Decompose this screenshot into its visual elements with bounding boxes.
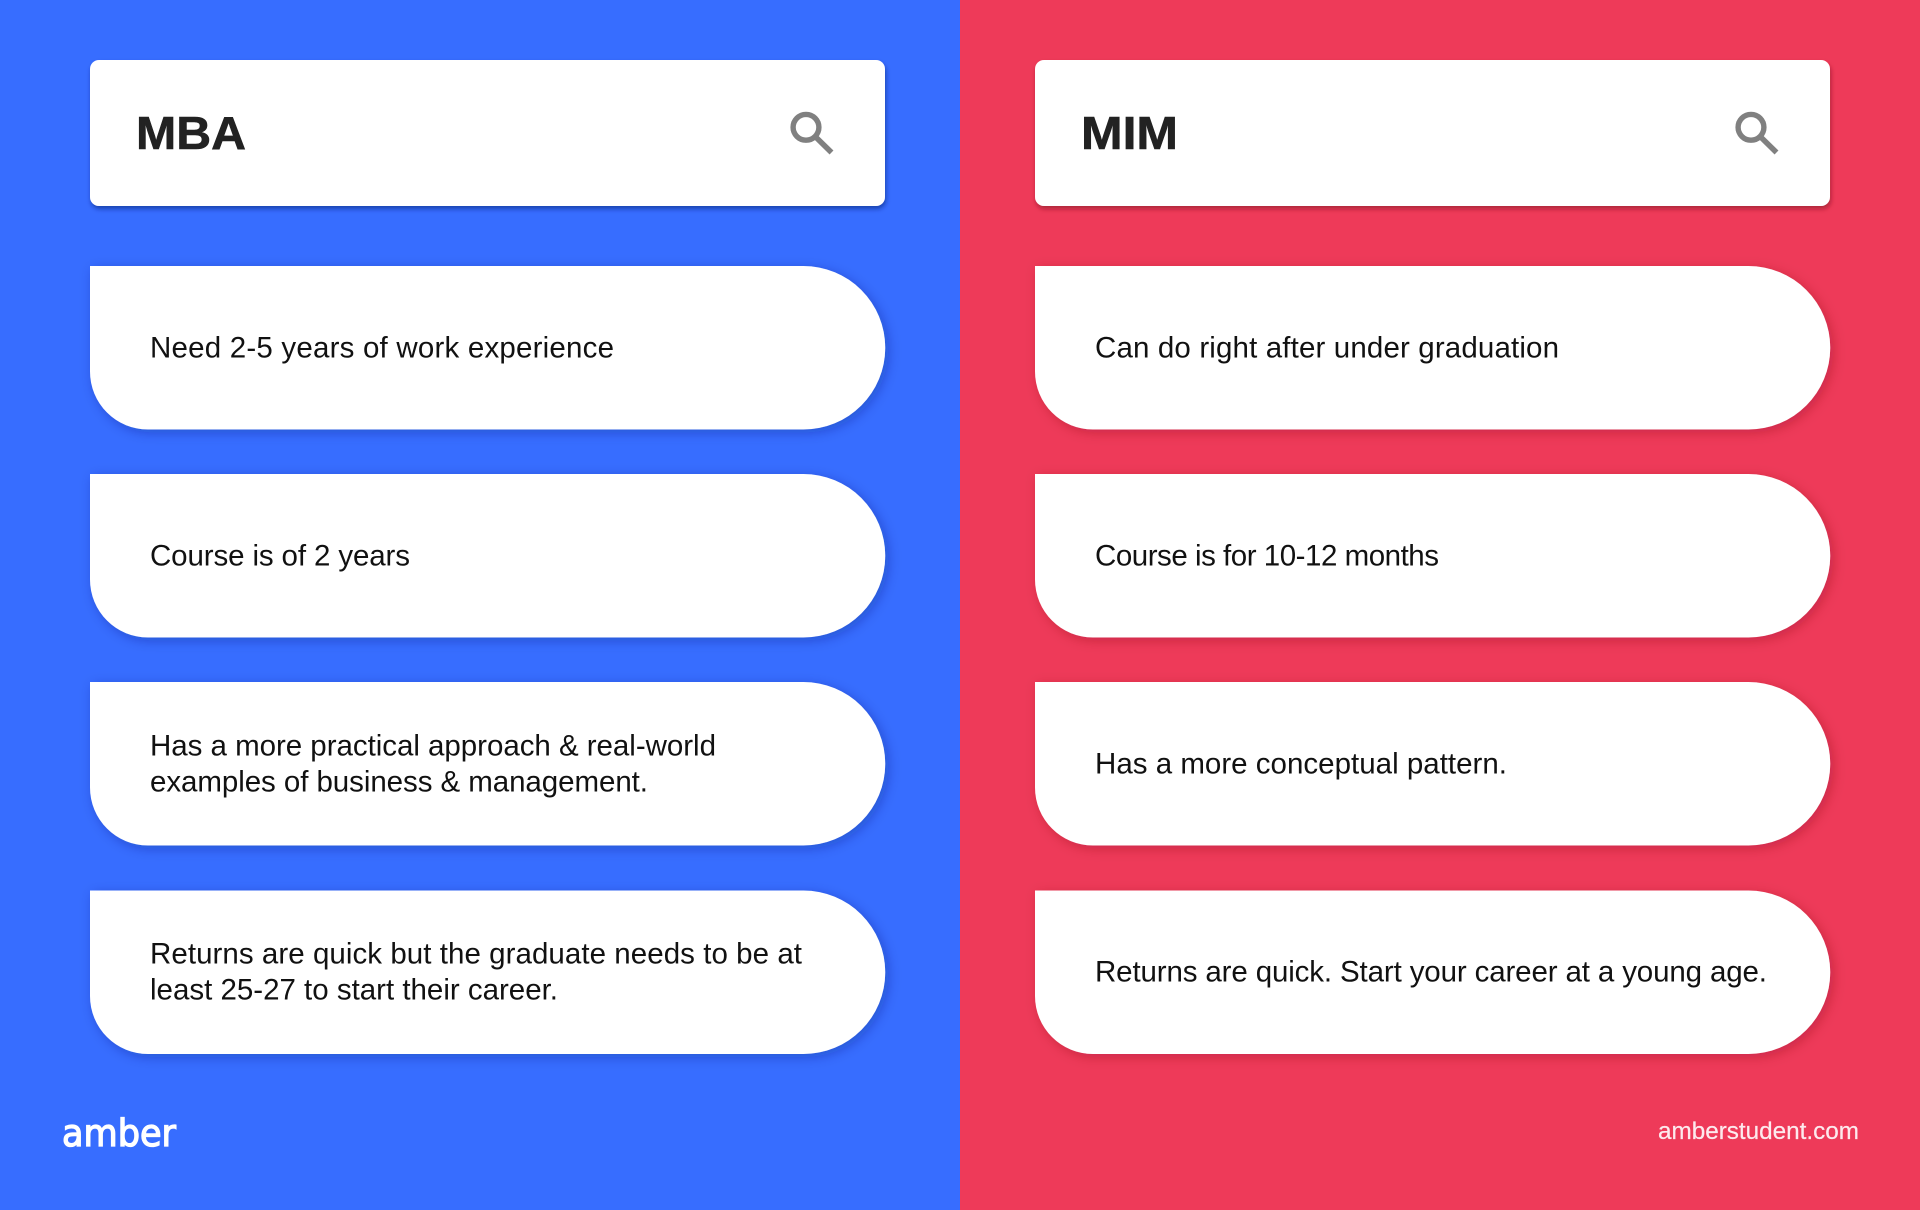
heading: MIM: MIM [1081,107,1178,159]
header card: MBA [90,60,885,206]
icon: search [1738,114,1776,152]
text: MBA returns: least 25-27 to start their career. [150,974,558,1006]
card: MBA returns [90,890,885,1054]
logo: amber: amber [62,1112,177,1155]
text: MIM returns: Returns are quick. Start your career at a young age. [1095,956,1767,988]
text: MIM duration: Course is for 10-12 months [1095,540,1439,572]
card: MBA approach [90,682,885,846]
panel: MIM [960,0,1920,1210]
card: MBA experience [90,266,885,430]
website: amberstudent.com: amberstudent.com [1658,1118,1859,1145]
text: MIM experience: Can do right after under graduation [1095,332,1559,364]
card: MIM returns [1035,890,1830,1054]
heading: MBA: MBA [136,107,246,159]
card: MIM approach [1035,682,1830,846]
text: MBA duration: Course is of 2 years [150,540,410,572]
text: MBA approach [150,730,716,798]
header card: MIM [1035,60,1830,206]
text: MBA approach: examples of business & management. [150,766,648,798]
text: MBA returns [150,938,802,1006]
text: MIM approach: Has a more conceptual pattern. [1095,748,1507,780]
panel: MBA [0,0,960,1210]
text: MBA experience: Need 2-5 years of work experience [150,332,614,364]
card: MIM duration [1035,474,1830,638]
card: MBA duration [90,474,885,638]
text: MBA approach: Has a more practical approach & real-world [150,730,716,762]
icon: search [793,114,832,152]
card: MIM experience [1035,266,1830,430]
text: MBA returns: Returns are quick but the graduate needs to be at [150,938,802,970]
